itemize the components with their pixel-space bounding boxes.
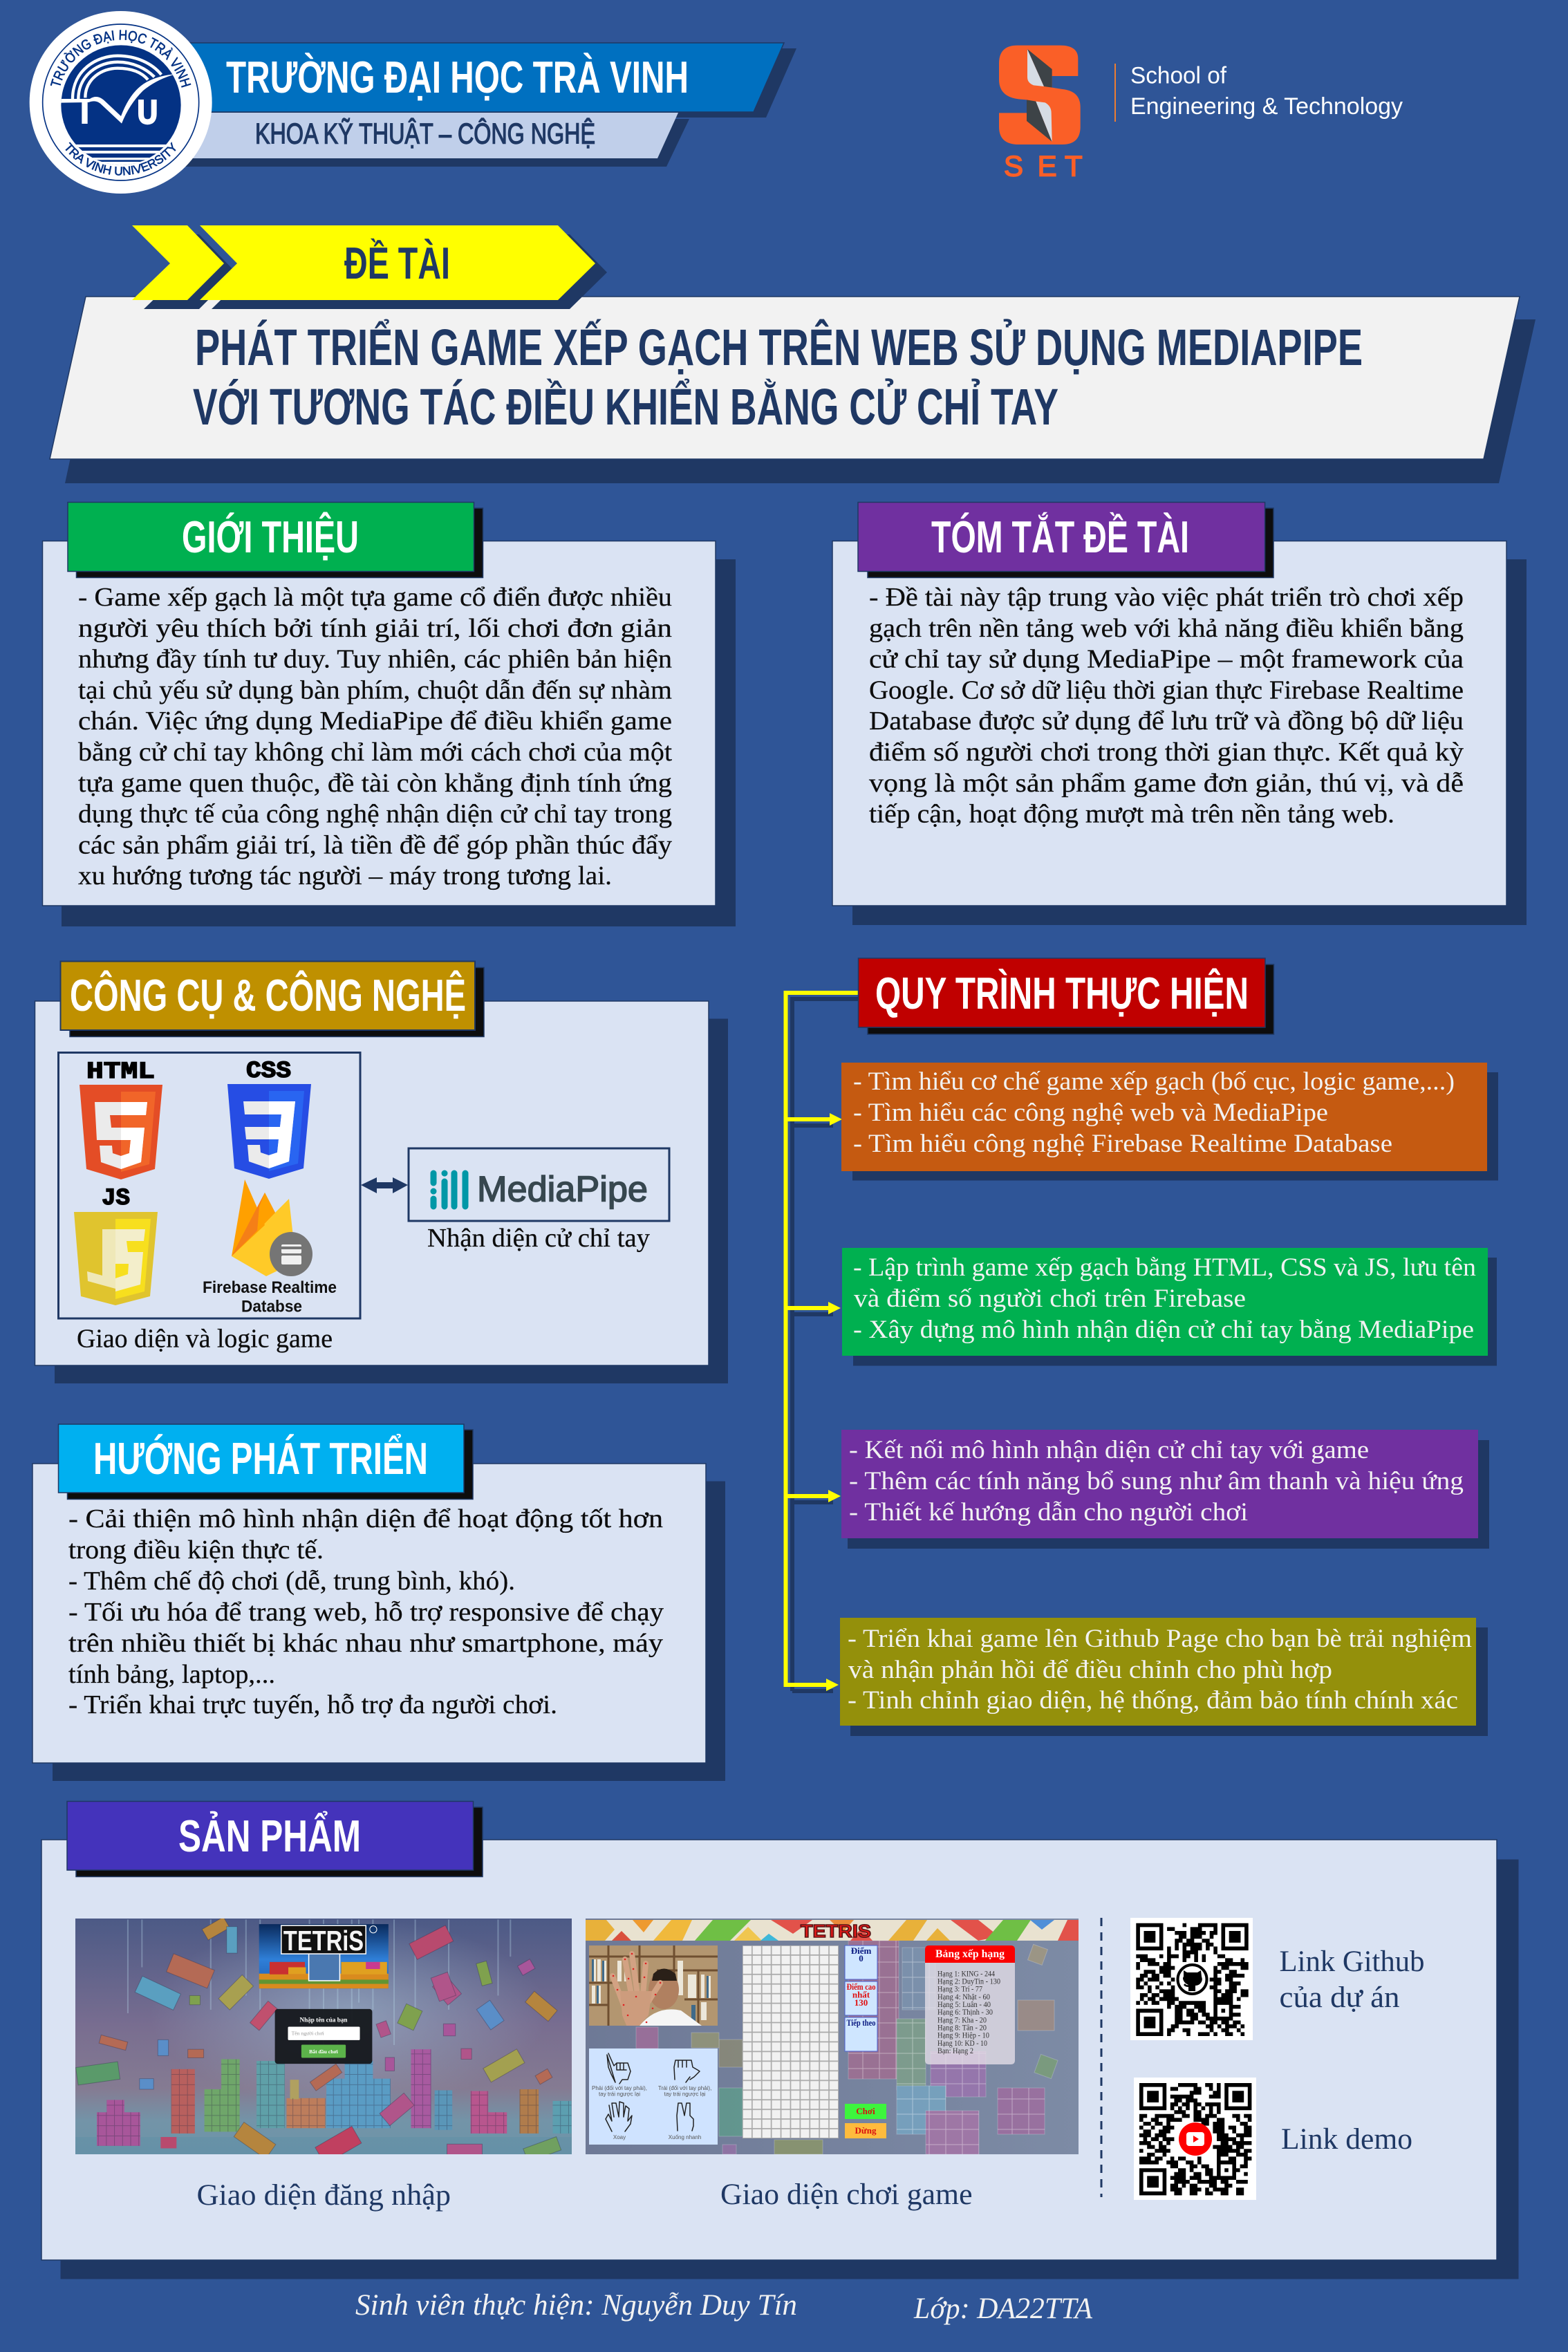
login form: Tên người chơi (292, 2031, 324, 2037)
youtube mark (1179, 2122, 1212, 2156)
faculty name text: KHOA KỸ THUẬT – CÔNG NGHỆ (255, 118, 595, 149)
MediaPipe logo box (409, 1148, 669, 1221)
process step 4 (840, 1618, 1488, 1736)
process step 4: và nhận phản hồi để điều chỉnh cho phù hợp (848, 1656, 1332, 1684)
text: summary: gạch trên nền tảng web với khả năng điều khiển bằng (869, 614, 1464, 643)
leaderboard: Hạng 3: Trí - 77 (937, 1986, 982, 1994)
process step 1: - Tìm hiểu các công nghệ web và MediaPipe (853, 1099, 1328, 1127)
school name: School of (1130, 62, 1227, 88)
text: summary: Google. Cơ sở dữ liệu thời gian thực Firebase Realtime (869, 675, 1464, 704)
heading: tools and technologies: CÔNG CỤ & CÔNG NGHỆ (70, 970, 466, 1020)
login form: Bắt đầu chơi (309, 2048, 339, 2055)
panel: product (41, 1802, 1518, 2279)
heading: product: SẢN PHẨM (178, 1811, 361, 1861)
title panel (50, 297, 1536, 483)
QR code: Github (1130, 1918, 1253, 2040)
text: introduction: nhưng đầy tính tư duy. Tuy nhiên, các phiên bản hiện (78, 645, 672, 674)
text: summary: vọng là một sản phẩm game đơn giản, thú vị, và dễ (869, 769, 1464, 798)
heading: product (67, 1802, 483, 1876)
SET logo: E (1038, 149, 1057, 182)
university logo: TRƯỜNG ĐẠI HỌC TRÀ VINH (50, 30, 191, 88)
score boxes: Điểm cao (846, 1981, 875, 1992)
game buttons: Dừng (855, 2125, 877, 2136)
process step 2 (842, 1248, 1497, 1366)
icon: Firebase (203, 1179, 337, 1316)
text: summary: cử chỉ tay sử dụng MediaPipe – một framework của (869, 645, 1464, 674)
process step 4: - Triển khai game lên Github Page cho bạn bè trải nghiệm (848, 1625, 1472, 1653)
icon: HTML5: HTML (86, 1059, 155, 1085)
text: future development: - Cải thiện mô hình nhận diện để hoạt động tốt hơn (68, 1504, 663, 1533)
leaderboard: Hạng 5: Luân - 40 (937, 2001, 991, 2009)
footer: student name: Sinh viên thực hiện: Nguyễn Duy Tín (355, 2289, 797, 2322)
topic tag (132, 225, 607, 309)
screenshot: game screen (586, 1919, 1079, 2154)
leaderboard: Hạng 7: Kha - 20 (937, 2016, 987, 2024)
game logo: TETRiS (283, 1925, 364, 1957)
school name: Engineering & Technology (1130, 93, 1403, 120)
topic tag text: ĐỀ TÀI (344, 238, 450, 288)
text: future development: - Thêm chế độ chơi (dễ, trung bình, khó). (68, 1567, 515, 1596)
process step 2: - Xây dựng mô hình nhận diện cử chỉ tay bằng MediaPipe (853, 1316, 1474, 1344)
text: future development: - Tối ưu hóa để trang web, hỗ trợ responsive để chạy (68, 1598, 664, 1627)
game banner (586, 1920, 1079, 1941)
leaderboard: Hạng 10: KD - 10 (937, 2040, 987, 2048)
text: introduction (78, 583, 672, 890)
university name text: TRƯỜNG ĐẠI HỌC TRÀ VINH (226, 52, 689, 102)
arrow: double-headed (361, 1177, 408, 1193)
heading: process (859, 958, 1273, 1034)
panel: tools and technologies (35, 961, 728, 1383)
caption: web stack: Giao diện và logic game (77, 1325, 333, 1354)
gesture guide: Trái (đối với tay phải), (658, 2085, 711, 2091)
university logo (29, 11, 212, 194)
SET logo: T (1065, 149, 1083, 182)
heading: introduction (68, 502, 483, 578)
title text (193, 319, 1363, 436)
caption: Github link: của dự án (1279, 1981, 1399, 2014)
heading: tools and technologies (61, 961, 484, 1037)
gesture guide (589, 2048, 718, 2145)
footer: class: Lớp: DA22TTA (913, 2293, 1093, 2325)
university logo: TRA VINH UNIVERSITY (65, 142, 176, 176)
heading: process: QUY TRÌNH THỰC HIỆN (875, 968, 1249, 1018)
heading: future development: HƯỚNG PHÁT TRIỂN (93, 1433, 428, 1484)
gesture guide: tay trái ngược lại (664, 2091, 706, 2098)
process step 3: - Kết nối mô hình nhận diện cử chỉ tay với game (849, 1436, 1369, 1464)
process step 1: - Tìm hiểu cơ chế game xếp gạch (bố cục, logic game,...) (853, 1067, 1455, 1096)
icon: CSS3: CSS (246, 1058, 291, 1085)
leaderboard: Bảng xếp hạng (935, 1948, 1005, 1960)
text: introduction: bằng cử chỉ tay không chỉ làm mới cách chơi của một (78, 738, 672, 767)
heading: introduction: GIỚI THIỆU (182, 512, 359, 562)
webcam view (589, 1945, 718, 2027)
text: future development: trên nhiều thiết bị khác nhau như smartphone, máy (68, 1629, 663, 1658)
score boxes: nhất (852, 1990, 870, 1999)
header banner: university name (173, 43, 796, 167)
login form: Nhập tên của bạn (299, 2016, 348, 2023)
login form (275, 2009, 372, 2064)
text: introduction: các sản phẩm giải trí, là tiền đề để góp phần thúc đẩy (78, 830, 672, 859)
icon: CSS3 (227, 1058, 311, 1179)
text: introduction: - Game xếp gạch là một tựa game cổ điển được nhiều (78, 583, 672, 612)
caption: login screen: Giao diện đăng nhập (196, 2179, 451, 2212)
SET logo (999, 46, 1083, 182)
leaderboard: Hạng 6: Thịnh - 30 (937, 2008, 993, 2017)
text: summary: tiếp cận, hoạt động mượt mà trên nền tảng web. (869, 800, 1394, 829)
caption: Github link (1279, 1945, 1424, 2014)
screenshot: login screen (75, 1917, 572, 2164)
web stack frame (58, 1052, 360, 1318)
panel: summary (832, 502, 1527, 925)
github mark (1175, 1962, 1210, 1997)
score boxes: 130 (855, 1997, 868, 2008)
QR code: demo (1134, 2078, 1256, 2200)
process step 3 (841, 1430, 1489, 1549)
text: future development: trong điều kiện thực tế. (68, 1536, 324, 1565)
text: future development: - Triển khai trực tuyến, hỗ trợ đa người chơi. (68, 1690, 557, 1719)
gesture guide: Xuống nhanh (669, 2134, 701, 2140)
gesture guide: Phải (đối với tay phải), (592, 2085, 647, 2091)
game logo (259, 1924, 389, 1988)
icon: Firebase: Databse (241, 1297, 302, 1316)
process step 2: và điểm số người chơi trên Firebase (854, 1285, 1246, 1313)
process step 1: - Tìm hiểu công nghệ Firebase Realtime Database (853, 1130, 1392, 1158)
MediaPipe logo box: MediaPipe (477, 1170, 648, 1210)
game board (743, 1945, 839, 2138)
heading: future development (58, 1424, 473, 1499)
leaderboard: Hạng 1: KING - 244 (937, 1970, 995, 1978)
school name (1114, 62, 1403, 122)
caption: MediaPipe: Nhận diện cử chỉ tay (427, 1224, 650, 1253)
text: introduction: chán. Việc ứng dụng MediaPipe để điều khiển game (78, 707, 672, 736)
process step 3: - Thêm các tính năng bổ sung như âm thanh và hiệu ứng (849, 1467, 1464, 1495)
panel: introduction (43, 502, 736, 926)
process step 1 (841, 1063, 1498, 1181)
text: summary: - Đề tài này tập trung vào việc phát triển trò chơi xếp (869, 583, 1464, 612)
caption: game screen: Giao diện chơi game (720, 2178, 972, 2211)
score boxes: 0 (859, 1953, 864, 1963)
leaderboard (925, 1945, 1015, 2064)
process step 3: - Thiết kế hướng dẫn cho người chơi (849, 1498, 1248, 1527)
dashed divider (1101, 1918, 1102, 2197)
caption: Github link: Link Github (1279, 1945, 1424, 1978)
process step 2: - Lập trình game xếp gạch bằng HTML, CSS và JS, lưu tên (853, 1253, 1476, 1282)
score boxes: Điểm (851, 1945, 871, 1956)
gesture guide: Xoay (613, 2134, 626, 2140)
gesture guide: tay trái ngược lại (599, 2091, 640, 2098)
leaderboard: Hạng 4: Nhật - 60 (937, 1993, 990, 2001)
panel: future development (32, 1424, 725, 1781)
text: future development: tính bảng, laptop,... (68, 1660, 275, 1689)
caption: demo link: Link demo (1281, 2123, 1412, 2156)
icon: JavaScript: JS (102, 1186, 130, 1212)
icon: HTML5 (80, 1059, 162, 1179)
leaderboard: Bạn: Hạng 2 (937, 2047, 973, 2055)
text: introduction: tại chủ yếu sử dụng bàn phím, chuột dẫn đến sự nhàm (78, 675, 672, 704)
heading: summary: TÓM TẮT ĐỀ TÀI (931, 512, 1189, 562)
icon: JavaScript (74, 1186, 158, 1305)
text: summary: Database được sử dụng để lưu trữ và đồng bộ dữ liệu (869, 707, 1464, 736)
text: introduction: dụng thực tế của công nghệ nhận diện cử chỉ tay trong (78, 800, 672, 829)
title text: VỚI TƯƠNG TÁC ĐIỀU KHIỂN BẰNG CỬ CHỈ TAY (193, 378, 1058, 436)
text: introduction: xu hướng tương tác người – máy trong tương lai. (78, 861, 612, 890)
text: summary: điểm số người chơi trong thời gian thực. Kết quả kỳ (869, 738, 1464, 767)
text: introduction: người yêu thích bởi tính giải trí, lối chơi đơn giản (78, 614, 672, 643)
text: future development (68, 1504, 664, 1719)
text: introduction: tựa game quen thuộc, đề tài còn khẳng định tính ứng (78, 769, 672, 798)
score boxes (845, 1945, 877, 2051)
heading: summary (858, 502, 1273, 578)
leaderboard: Hạng 9: Hiệp - 10 (937, 2032, 989, 2040)
SET logo: S (1004, 149, 1023, 182)
game buttons: Chơi (856, 2106, 875, 2116)
text: summary (869, 583, 1464, 829)
icon: Firebase: Firebase Realtime (203, 1278, 337, 1297)
score boxes: Tiếp theo (846, 2017, 875, 2028)
game banner: TETRIS (801, 1921, 871, 1941)
process step 4: - Tinh chỉnh giao diện, hệ thống, đảm bảo tính chính xác (848, 1686, 1458, 1715)
game buttons (845, 2104, 886, 2138)
leaderboard: Hạng 8: Tân - 20 (937, 2024, 987, 2033)
process connector: yellow arrows (785, 993, 858, 1691)
leaderboard: Hạng 2: DuyTin - 130 (937, 1977, 1000, 1986)
